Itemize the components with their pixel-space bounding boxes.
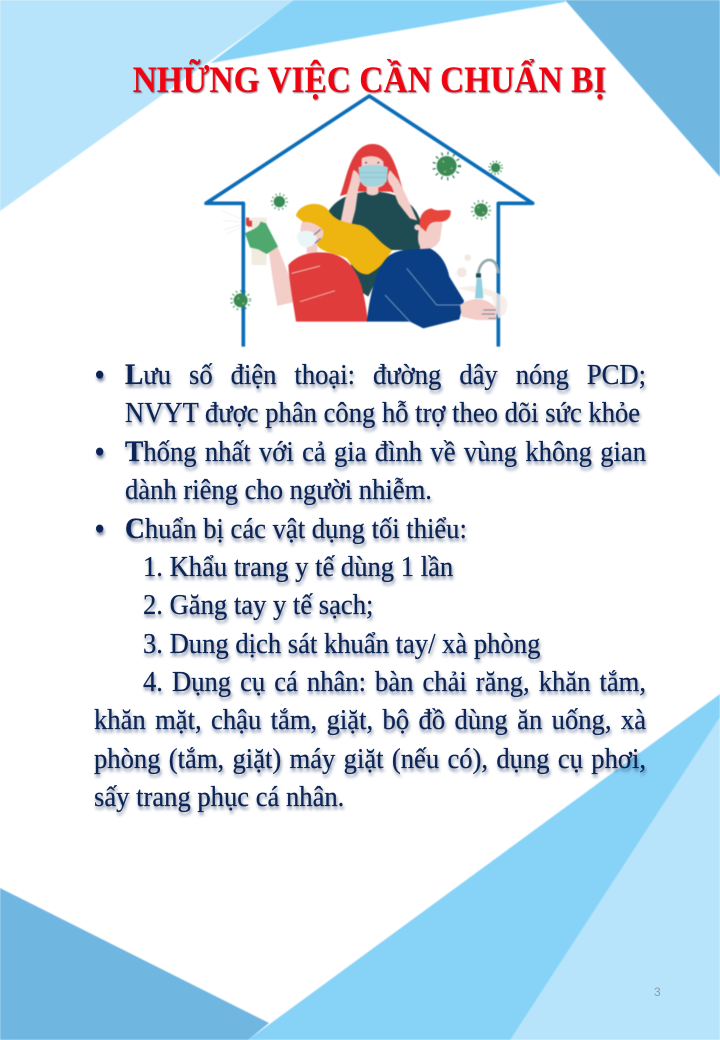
bullet 1 line 1: Lưu số điện thoại: đường dây nóng PCD; — [125, 358, 646, 390]
title: NHỮNG VIỆC CẦN CHUẨN BỊ — [133, 59, 606, 100]
bullet 2 line 2: dành riêng cho người nhiễm. — [125, 474, 432, 505]
bullet 3: • — [95, 513, 104, 544]
man washing hands — [367, 208, 507, 328]
item 1: 1. Khẩu trang y tế dùng 1 lần — [143, 551, 453, 582]
bullet 1: • — [95, 359, 104, 390]
woman with yellow hair — [245, 204, 392, 322]
icon: house outline — [206, 96, 533, 347]
item 4 line 2: khăn mặt, chậu tắm, giặt, bộ đồ dùng ăn uống, xà — [94, 704, 646, 735]
icon: spray sparkle — [222, 211, 240, 234]
woman with red hair and mask — [327, 144, 421, 297]
text block: preparation list — [94, 358, 648, 818]
item 4 line 3: phòng (tắm, giặt) máy giặt (nếu có), dụng cụ phơi, — [94, 743, 646, 774]
bullet 1 line 2: NVYT được phân công hỗ trợ theo dõi sức khỏe — [125, 397, 640, 428]
item 3: 3. Dung dịch sát khuẩn tay/ xà phòng — [143, 628, 540, 659]
icon: viruses — [231, 153, 502, 310]
item 2: 2. Găng tay y tế sạch; — [143, 589, 373, 620]
page number: 3 — [654, 985, 661, 999]
bullet 3 heading: Chuẩn bị các vật dụng tối thiểu: — [125, 512, 467, 544]
bullet 2: • — [95, 436, 104, 467]
item 4 line 1: 4. Dụng cụ cá nhân: bàn chải răng, khăn tắm, — [143, 666, 646, 697]
illustration: house with family and viruses — [203, 93, 536, 348]
bullet 2 line 1: Thống nhất với cả gia đình về vùng không gian — [125, 434, 646, 467]
item 4 line 4: sấy trang phục cá nhân. — [94, 781, 344, 812]
